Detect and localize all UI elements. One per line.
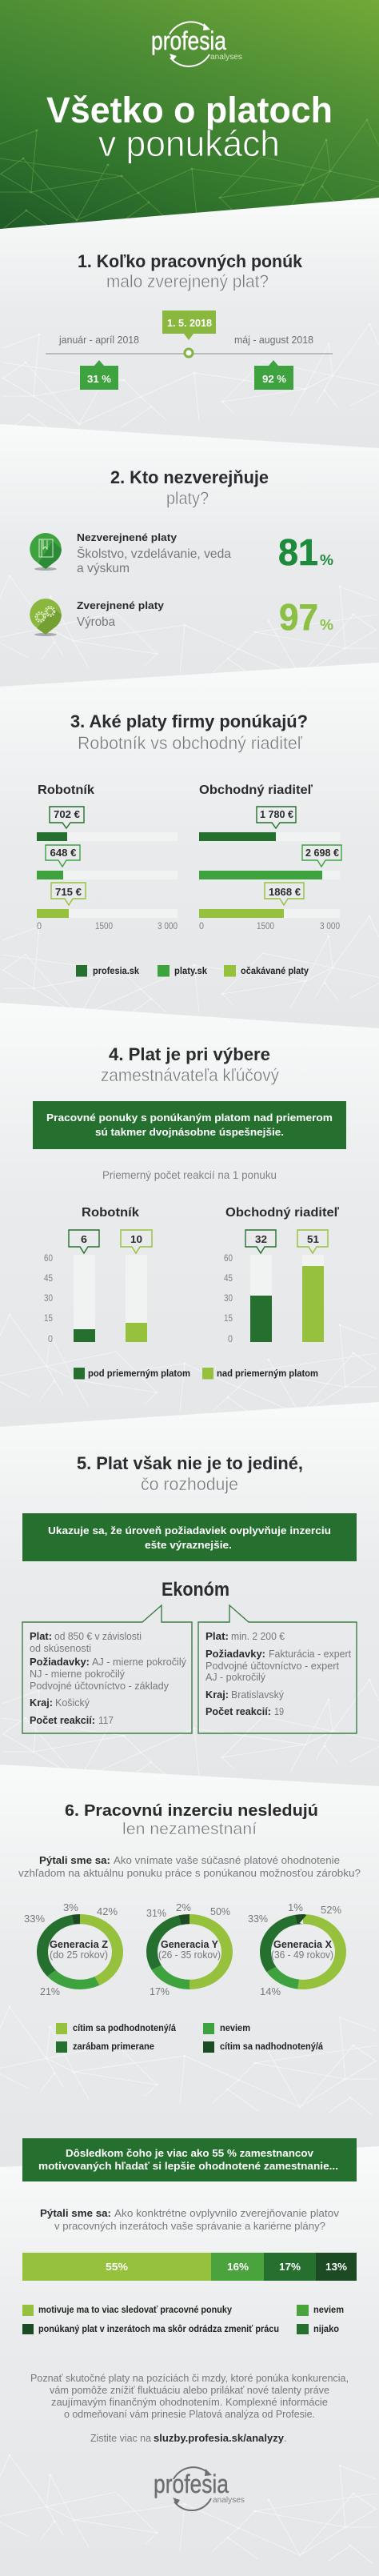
card: left offer: Kraj: <box>30 1697 53 1709</box>
bar chart: Robotník reactions: Robotník <box>82 1206 139 1220</box>
heading 2: platy? <box>166 488 209 508</box>
badge 31 %: 31 % <box>87 373 111 385</box>
card: left offer: NJ - mierne pokročilý <box>30 1668 125 1680</box>
badge 92 % <box>254 360 293 390</box>
bar chart: Obchodný riaditeľ reactions: 32 <box>255 1233 267 1245</box>
donut chart: Generacia Z: 21% <box>40 1985 60 1997</box>
closing paragraph: o odmeňovaní vám prinesie Platová analýza od Profesie. <box>64 2408 315 2420</box>
stat: nezverejnené platy: 81 <box>278 531 318 573</box>
callout: green box <box>33 1101 346 1149</box>
stat: zverejnené platy: Výroba <box>77 615 115 629</box>
bar chart: Robotník: 715 € <box>55 886 82 898</box>
donut chart: Generacia Z: 42% <box>97 1905 118 1917</box>
legend: reactions: pod priemerným platom <box>88 1369 190 1379</box>
panel: section 2 <box>0 424 379 696</box>
legend: donuts: zarábam primerane <box>73 2042 154 2052</box>
bar chart: Robotník: 648 € <box>50 847 77 859</box>
bar chart: Robotník: 1500 <box>95 920 113 931</box>
card: right offer <box>198 1605 357 1733</box>
donut chart: Generacia Z: 3% <box>63 1901 78 1913</box>
bar chart: Obchodný riaditeľ: Obchodný riaditeľ <box>199 783 313 797</box>
card: left offer: Košický <box>55 1697 90 1709</box>
donut chart: Generacia X: 52% <box>321 1904 341 1916</box>
card: right offer: Kraj: <box>205 1689 229 1701</box>
callout: green box: Pracovné ponuky s ponúkaným platom nad priemerom <box>46 1112 333 1124</box>
stat: nezverejnené platy: a výskum <box>77 562 130 575</box>
stacked bar chart: 17% <box>279 2261 301 2273</box>
card: left offer: Podvojné účtovníctvo - základy <box>30 1680 169 1692</box>
legend: stacked bar <box>22 2305 344 2334</box>
donut chart: Generacia X <box>248 1901 341 1997</box>
card: left offer: Počet reakcií: <box>30 1714 95 1726</box>
chart caption: Priemerný počet reakcií na 1 ponuku <box>102 1168 277 1181</box>
heading 1 <box>78 251 303 291</box>
bar chart: Robotník reactions: 30 <box>44 1292 53 1304</box>
logo: profesia analyses white: analyses <box>210 53 242 62</box>
bar chart: Robotník: 702 € <box>54 808 80 820</box>
bar chart: Obchodný riaditeľ: 2 698 € <box>305 847 339 859</box>
bar chart: Obchodný riaditeľ: 0 <box>199 920 204 931</box>
stat: nezverejnené platy: Nezverejnené platy <box>77 531 178 543</box>
bar chart: Obchodný riaditeľ reactions: 45 <box>224 1272 233 1284</box>
donut chart: Generacia Y: 31% <box>146 1907 166 1919</box>
legend: salary sources: platy.sk <box>174 967 208 976</box>
donut chart: Generacia X: (36 - 49 rokov) <box>271 1949 333 1961</box>
card: right offer: AJ - pokročilý <box>205 1671 265 1683</box>
link line: . <box>284 2432 287 2444</box>
stacked bar chart: 16% <box>227 2261 249 2273</box>
donut chart: Generacia Z: (do 25 rokov) <box>50 1949 108 1961</box>
heading 5: 5. Plat však nie je to jediné, <box>77 1453 303 1473</box>
timeline <box>46 310 333 390</box>
bar chart: Robotník reactions: 60 <box>44 1252 53 1264</box>
bar chart: Obchodný riaditeľ reactions: 51 <box>307 1233 319 1245</box>
donut chart: Generacia Y <box>146 1901 230 1997</box>
question 1 <box>18 1854 361 1879</box>
stat: zverejnené platy: % <box>320 617 333 633</box>
heading 6: len nezamestnaní <box>122 1821 257 1838</box>
heading 1: malo zverejnený plat? <box>106 271 269 291</box>
callout: green box: motivovaných hľadať si lepšie ohodnotené zamestnanie... <box>38 2160 338 2172</box>
legend: salary sources: očakávané platy <box>241 967 309 976</box>
donut chart: Generacia Y: 2% <box>176 1901 191 1913</box>
card: left offer: Plat: <box>30 1630 52 1642</box>
panel: section 3 <box>0 663 379 1040</box>
donut chart: Generacia X: Generacia X <box>273 1938 332 1950</box>
bar chart: Obchodný riaditeľ: 1500 <box>257 920 274 931</box>
card: right offer: Podvojné účtovníctvo - expert <box>205 1660 339 1672</box>
heading 2 <box>110 467 269 508</box>
title: Všetko o platoch <box>46 90 333 130</box>
donut chart: Generacia Y: (26 - 35 rokov) <box>158 1949 221 1961</box>
legend: stacked bar: motivuje ma to viac sledovať pracovné ponuky <box>38 2306 233 2315</box>
heading 1: 1. Koľko pracovných ponúk <box>78 251 303 271</box>
stat: nezverejnené platy: Školstvo, vzdelávanie, veda <box>77 546 231 561</box>
legend: stacked bar: neviem <box>313 2306 344 2315</box>
panel: header <box>0 0 379 240</box>
donut chart: Generacia Z <box>24 1901 118 1997</box>
card: right offer: Požiadavky: <box>205 1648 265 1660</box>
question 1: Ako vnímate vaše súčasné platové ohodnotenie <box>114 1854 340 1866</box>
bar chart: Robotník reactions: 6 <box>81 1233 87 1245</box>
callout: green box: sú takmer dvojnásobne úspešnejšie. <box>95 1126 284 1138</box>
heading 4 <box>101 1044 279 1085</box>
closing paragraph: vám pomôže znížiť fluktuáciu alebo prilákať nové talenty práve <box>50 2384 329 2396</box>
card: left offer <box>22 1605 192 1733</box>
bar chart: Robotník reactions: 10 <box>130 1233 142 1245</box>
title <box>46 90 333 164</box>
heading 4: 4. Plat je pri výbere <box>109 1044 270 1064</box>
closing paragraph: Poznať skutočné platy na pozíciách či mzdy, ktoré ponúka konkurencia, <box>30 2372 349 2384</box>
stacked bar chart: 55% <box>106 2261 128 2273</box>
closing paragraph: zaujímavým finančným ohodnotením. Komplexné informácie <box>51 2396 328 2408</box>
heading 3 <box>70 711 308 753</box>
date badge: 1. 5. 2018 <box>167 317 212 329</box>
stacked bar chart: 13% <box>325 2261 347 2273</box>
heading 6 <box>65 1802 318 1838</box>
legend: donuts <box>56 2023 324 2053</box>
title: v ponukách <box>98 123 280 164</box>
donut chart: Generacia Z: 33% <box>24 1913 45 1925</box>
card: right offer: Bratislavský <box>231 1689 284 1701</box>
heading 3: Robotník vs obchodný riaditeľ <box>78 733 303 753</box>
legend: salary sources: profesia.sk <box>93 967 140 976</box>
donut chart: Generacia X: 1% <box>288 1901 303 1913</box>
bar chart: Obchodný riaditeľ: 1868 € <box>269 886 301 898</box>
legend: stacked bar: nijako <box>313 2325 339 2334</box>
logo: profesia analyses white <box>151 22 242 66</box>
question 2: Ako konktrétne ovplyvnilo zverejňovanie platov <box>114 2207 340 2219</box>
bar chart: Obchodný riaditeľ reactions: 30 <box>224 1292 233 1304</box>
bar chart: Robotník: 0 <box>37 920 42 931</box>
heading 4: zamestnávateľa kľúčový <box>101 1065 279 1085</box>
legend: donuts: cítim sa podhodnotený/á <box>73 2024 177 2033</box>
bar chart: Obchodný riaditeľ reactions: 60 <box>224 1252 233 1264</box>
logo: profesia analyses grey <box>154 2467 245 2510</box>
icon: book pin <box>30 533 62 571</box>
bar chart: Obchodný riaditeľ <box>199 783 341 931</box>
panel: section 5 <box>0 1402 379 1793</box>
card: left offer: 117 <box>98 1714 114 1726</box>
donut chart: Generacia Y: Generacia Y <box>161 1938 218 1950</box>
legend: reactions: nad priemerným platom <box>217 1369 318 1379</box>
donut chart: Generacia Y: 17% <box>150 1985 170 1997</box>
badge 92 %: 92 % <box>262 373 286 385</box>
logo: profesia analyses grey: analyses <box>213 2496 245 2505</box>
callout: green box <box>22 1513 357 1561</box>
panel: section 6 <box>0 1765 379 2177</box>
logo: profesia analyses white: profesia <box>151 26 226 55</box>
callout: green box <box>22 2138 357 2181</box>
stat: nezverejnené platy: % <box>320 552 333 568</box>
callout: green box: Ukazuje sa, že úroveň požiadaviek ovplyvňuje inzerciu <box>48 1524 331 1536</box>
bar chart: Obchodný riaditeľ reactions <box>224 1206 340 1344</box>
heading 5 <box>77 1453 303 1494</box>
bar chart: Obchodný riaditeľ reactions: 15 <box>224 1312 233 1324</box>
callout: green box: ešte výraznejšie. <box>145 1539 232 1551</box>
card: right offer: Fakturácia - expert <box>269 1648 351 1660</box>
card: left offer: od 850 € v závislosti <box>54 1630 142 1642</box>
link line: Zistite viac na <box>90 2432 152 2444</box>
logo: profesia analyses grey: profesia <box>154 2470 229 2498</box>
card: right offer: Počet reakcií: <box>205 1705 271 1717</box>
question 1: vzhľadom na aktuálnu ponuku práce s ponúkanou možnosťou zárobku? <box>18 1867 361 1879</box>
timeline: máj - august 2018 <box>234 334 313 346</box>
link line <box>90 2432 287 2444</box>
legend: salary sources <box>76 965 309 976</box>
card: left offer: AJ - mierne pokročilý <box>92 1656 186 1668</box>
stat: zverejnené platy <box>30 596 333 638</box>
heading 2: 2. Kto nezverejňuje <box>110 467 269 487</box>
donut chart: Generacia X: 33% <box>248 1913 268 1925</box>
heading 6: 6. Pracovnú inzerciu nesledujú <box>65 1802 318 1820</box>
date badge <box>162 310 216 340</box>
stacked bar chart <box>22 2253 357 2281</box>
donut chart: Generacia Y: 50% <box>210 1905 230 1917</box>
legend: donuts: cítim sa nadhodnotený/á <box>220 2042 324 2052</box>
bar chart: Robotník <box>37 783 178 931</box>
question 2 <box>40 2207 340 2232</box>
bar chart: Obchodný riaditeľ: 1 780 € <box>260 808 293 820</box>
bar chart: Robotník reactions <box>44 1206 152 1344</box>
heading 3: 3. Aké platy firmy ponúkajú? <box>70 711 308 731</box>
card: left offer: Požiadavky: <box>30 1656 90 1668</box>
bar chart: Obchodný riaditeľ: 3 000 <box>320 920 340 931</box>
donut chart: Generacia Z: Generacia Z <box>50 1938 108 1950</box>
link line: sluzby.profesia.sk/analyzy <box>154 2432 285 2444</box>
bar chart: Robotník: 3 000 <box>158 920 178 931</box>
bar chart: Obchodný riaditeľ reactions: 0 <box>228 1333 233 1344</box>
legend: donuts: neviem <box>220 2024 250 2033</box>
card: right offer: min. 2 200 € <box>231 1630 285 1642</box>
closing paragraph <box>30 2372 349 2420</box>
badge 31 % <box>80 360 118 390</box>
bar chart: Robotník reactions: 0 <box>48 1333 53 1344</box>
timeline: január - apríl 2018 <box>58 334 139 346</box>
panel: section 7 <box>0 2138 379 2576</box>
stat: nezverejnené platy <box>30 531 333 575</box>
stat: zverejnené platy: 97 <box>279 596 318 638</box>
panel: section 1 <box>0 198 379 456</box>
bar chart: Robotník: Robotník <box>38 783 94 797</box>
card: left offer: od skúsenosti <box>30 1642 91 1654</box>
bar chart: Robotník reactions: 45 <box>44 1272 53 1284</box>
heading 5: čo rozhoduje <box>141 1474 238 1494</box>
question 1: Pýtali sme sa: <box>39 1854 110 1866</box>
heading: Ekonóm: Ekonóm <box>162 1579 229 1600</box>
icon: gears pin <box>30 599 62 636</box>
question 2: Pýtali sme sa: <box>40 2207 111 2219</box>
stat: zverejnené platy: Zverejnené platy <box>77 599 165 611</box>
legend: reactions <box>74 1368 318 1380</box>
card: right offer: Plat: <box>205 1630 229 1642</box>
bar chart: Robotník reactions: 15 <box>44 1312 53 1324</box>
bar chart: Obchodný riaditeľ reactions: Obchodný riaditeľ <box>225 1206 340 1220</box>
legend: stacked bar: ponúkaný plat v inzerátoch ma skôr odrádza zmeniť prácu <box>38 2325 279 2334</box>
card: right offer: 19 <box>274 1705 284 1717</box>
callout: green box: Dôsledkom čoho je viac ako 55 % zamestnancov <box>66 2147 314 2159</box>
donut chart: Generacia X: 14% <box>260 1985 281 1997</box>
panel: section 4 <box>0 1003 379 1440</box>
question 2: v pracovných inzerátoch vaše správanie a kariérne plány? <box>54 2220 325 2232</box>
